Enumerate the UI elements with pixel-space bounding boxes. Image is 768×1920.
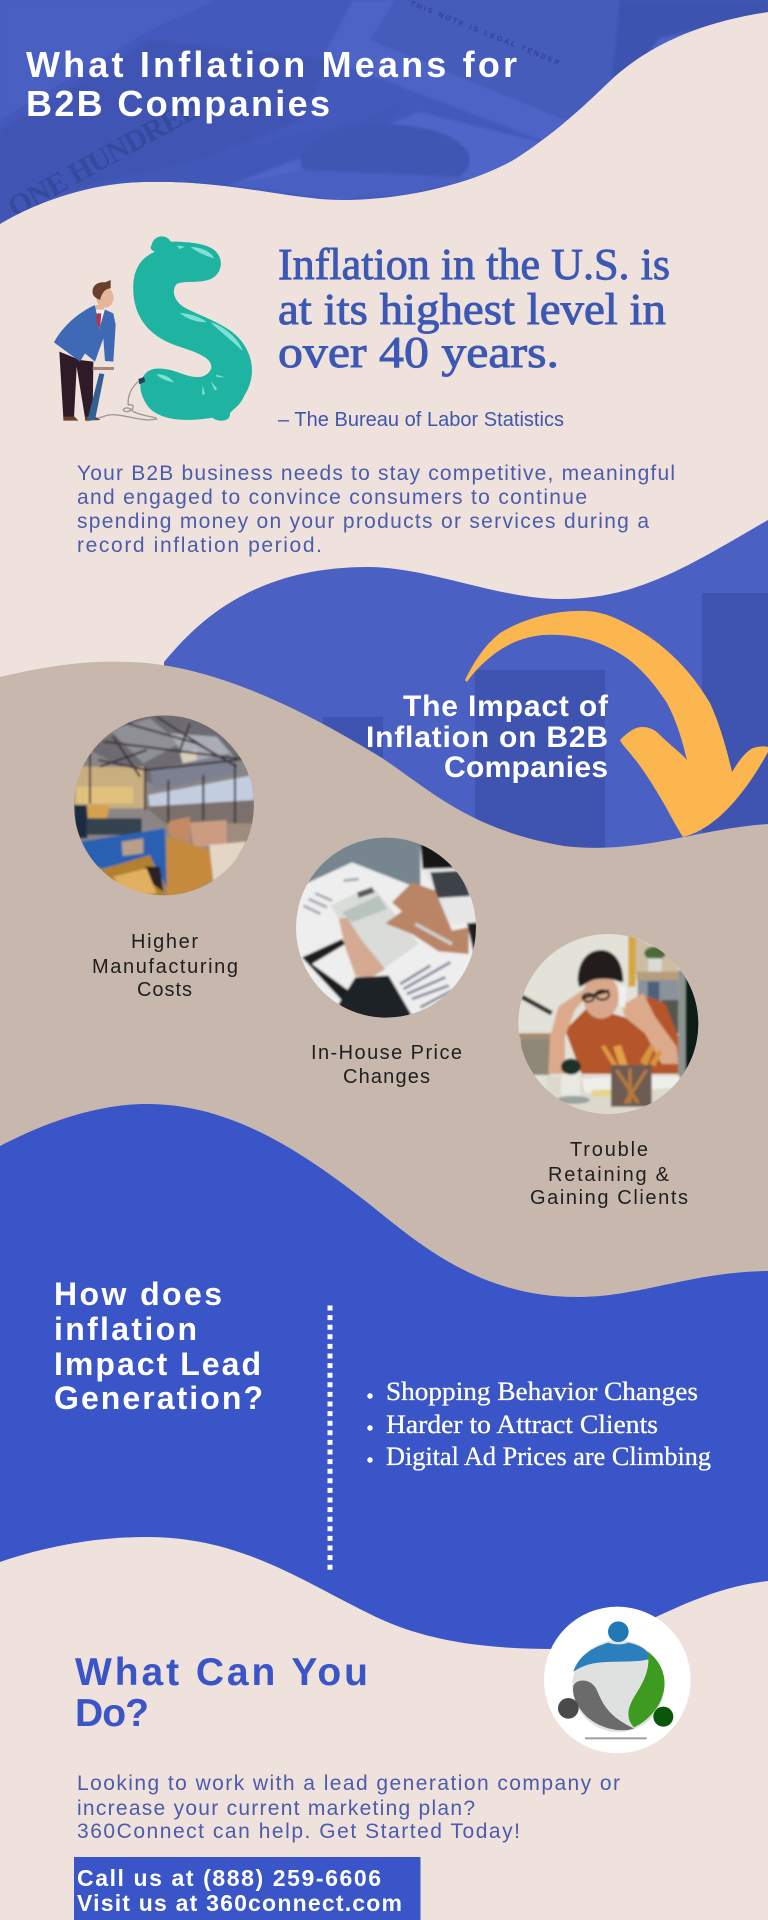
label: higher manufacturing costs: [92, 931, 238, 1001]
label: higher manufacturing costs: Higher: [131, 931, 198, 953]
label: trouble retaining and gaining clients: Trouble: [570, 1139, 648, 1161]
label: higher manufacturing costs: Costs: [137, 979, 192, 1001]
headline: inflation statement: over 40 years.: [278, 328, 559, 377]
photo: stressed woman on phone: [515, 930, 705, 1120]
text: call to action paragraph: increase your current marketing plan?: [77, 1797, 475, 1820]
heading: how does inflation impact lead generation: Generation?: [54, 1380, 263, 1416]
text: website: Visit us at 360connect.com: [77, 1890, 402, 1916]
dotted divider: [328, 1306, 332, 1570]
trousers: [59, 352, 93, 418]
label: trouble retaining and gaining clients: Gaining Clients: [530, 1187, 688, 1209]
text: banknote lettering: ONE HUNDRED: [2, 91, 206, 224]
label: trouble retaining and gaining clients: Retaining &: [548, 1164, 670, 1186]
headline: inflation statement: Inflation in the U.S. is: [278, 240, 670, 289]
photo: factory floor: [70, 710, 260, 900]
text: banknote legal note: THIS NOTE IS LEGAL TENDER: [409, 0, 560, 67]
title: B2B Companies: [26, 83, 330, 124]
text: call to action paragraph: Looking to work with a lead generation company or: [77, 1772, 620, 1795]
text: phone: Call us at (888) 259-6606: [77, 1865, 381, 1891]
heading: impact of inflation: The Impact of: [403, 690, 609, 723]
panel: taupe impact section: [0, 662, 768, 1300]
bullet: harder to attract: Harder to Attract Clients: [386, 1410, 658, 1439]
heading: impact of inflation: Companies: [444, 751, 608, 784]
icon: 360Connect logo: [544, 1607, 691, 1753]
panel: header money photo: [0, 0, 768, 230]
headline: inflation statement: at its highest level in: [278, 285, 666, 334]
label: higher manufacturing costs: Manufacturing: [92, 956, 238, 978]
label: trouble retaining and gaining clients: [530, 1139, 688, 1209]
label: in-house price changes: Changes: [343, 1066, 430, 1088]
icon: man pumping dollar balloon: [54, 236, 252, 421]
head: [96, 288, 114, 308]
heading: what can you do: What Can You: [75, 1651, 368, 1694]
heading: impact of inflation: Inflation on B2B: [366, 721, 608, 754]
text: intro paragraph: spending money on your products or services during a: [77, 510, 649, 533]
panel: contact box: [74, 1857, 420, 1920]
jacket: [54, 305, 116, 362]
balloon S: [133, 236, 252, 421]
heading: how does inflation impact lead generation: How does: [54, 1276, 222, 1312]
panel: impact wave with coin stacks: [164, 520, 768, 848]
text: intro paragraph: Your B2B business needs to stay competitive, meaningful: [77, 462, 675, 485]
text: intro paragraph: [77, 462, 675, 557]
bullet: digital ad prices: Digital Ad Prices are Climbing: [386, 1442, 711, 1471]
heading: how does inflation impact lead generation: Impact Lead: [54, 1346, 261, 1382]
text: intro paragraph: record inflation period.: [77, 534, 322, 557]
heading: impact of inflation: [366, 690, 609, 784]
heading: what can you do: [75, 1651, 368, 1735]
text: intro paragraph: and engaged to convince consumers to continue: [77, 486, 587, 509]
hose: [87, 382, 157, 421]
heading: how does inflation impact lead generation: [54, 1276, 263, 1416]
panel: bottom cream section: [0, 1537, 768, 1920]
title: [26, 44, 517, 124]
heading: what can you do: Do?: [75, 1692, 149, 1735]
arrow: yellow curved: [465, 611, 768, 837]
label: in-house price changes: In-House Price: [311, 1042, 462, 1064]
list: lead generation impacts: [367, 1377, 711, 1471]
text: source attribution: – The Bureau of Labor Statistics: [278, 409, 564, 431]
title: What Inflation Means for: [26, 44, 517, 85]
panel: lead generation blue section: [0, 1104, 768, 1700]
bullet: shopping behavior: Shopping Behavior Changes: [386, 1377, 698, 1406]
text: call to action paragraph: 360Connect can help. Get Started Today!: [77, 1820, 520, 1843]
shoes: [63, 417, 101, 421]
pump: [87, 373, 104, 420]
label: in-house price changes: [311, 1042, 462, 1088]
photo: calculator and charts: [296, 838, 476, 1018]
headline: inflation statement: [278, 240, 670, 377]
text: call to action paragraph: [77, 1772, 620, 1843]
heading: how does inflation impact lead generation: inflation: [54, 1311, 197, 1347]
